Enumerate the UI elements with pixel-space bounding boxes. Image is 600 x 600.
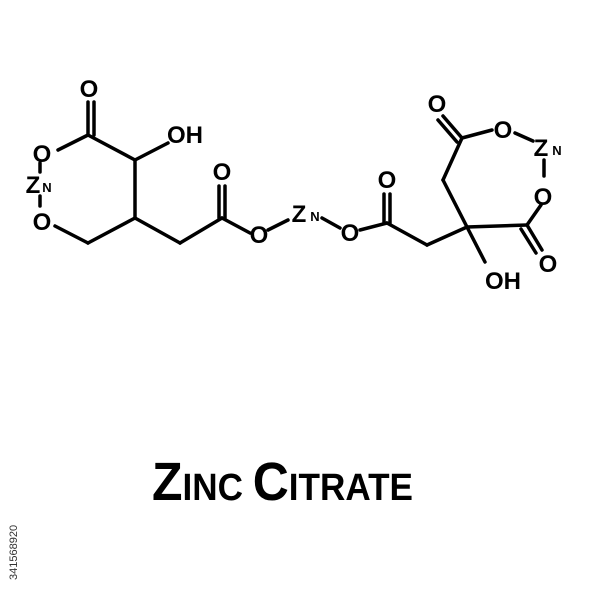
atom labels: O [250, 222, 268, 249]
title: ZINC CITRATE [152, 452, 413, 512]
atom labels: O [428, 91, 446, 118]
left ring bonds [40, 102, 288, 243]
atom labels: O [213, 159, 231, 186]
atom labels: N [552, 143, 562, 158]
right part bonds [322, 116, 544, 262]
atom labels: Z [534, 135, 548, 162]
atom labels: O [378, 167, 396, 194]
atom labels: O [534, 184, 552, 211]
atom labels: N [310, 209, 320, 224]
atom labels: N [42, 180, 52, 195]
atom labels: O [494, 117, 512, 144]
atom labels: OH [485, 268, 521, 295]
atom labels: Z [292, 201, 306, 228]
atom labels: O [539, 251, 557, 278]
atom labels [26, 76, 562, 295]
atom labels: O [80, 76, 98, 103]
atom labels: OH [167, 122, 203, 149]
atom labels: O [341, 220, 359, 247]
atom labels: Z [26, 172, 40, 199]
structure: zinc citrate molecule [40, 102, 544, 262]
atom labels: O [33, 141, 51, 168]
stock id vertical: 341568920 [8, 525, 20, 580]
atom labels: O [33, 209, 51, 236]
